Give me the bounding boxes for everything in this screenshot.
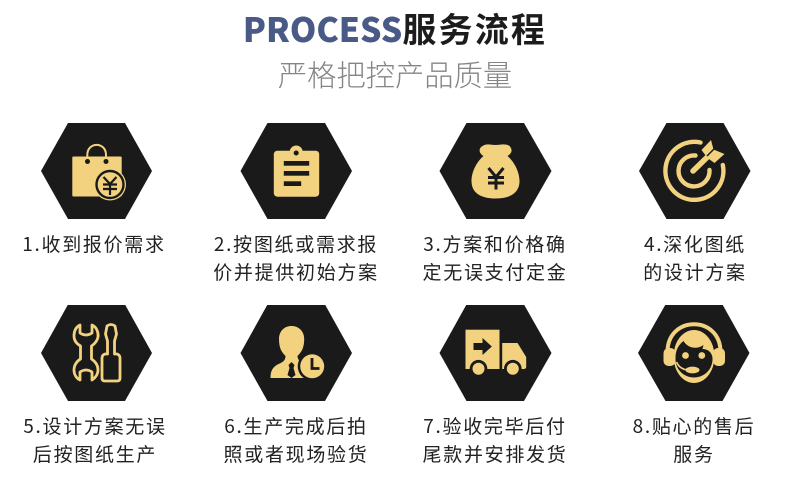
label: 照或者现场验货: [224, 440, 368, 466]
step 6: photos or on-site inspection: [224, 305, 368, 466]
step 8: after-sales service: [633, 305, 755, 466]
subtitle: 严格把控产品质量: [278, 53, 512, 95]
label: 6.生产完成后拍: [224, 412, 368, 439]
label: 4.深化图纸: [644, 230, 746, 257]
step 7: final payment and delivery: [423, 305, 567, 466]
label: [643, 230, 747, 284]
title: PROCESS服务流程: [243, 3, 547, 52]
icon: delivery truck: [440, 305, 552, 401]
icon: money bag: [440, 123, 552, 219]
label: 的设计方案: [643, 258, 747, 284]
icon: wrench and screwdriver: [41, 305, 152, 401]
icon: shopping bag with yen coin: [41, 123, 152, 219]
label: 5.设计方案无误: [23, 412, 167, 439]
label: [224, 412, 368, 466]
label: 3.方案和价格确: [423, 230, 567, 257]
label: 8.贴心的售后: [633, 412, 755, 439]
label: 1.收到报价需求: [22, 230, 166, 257]
label: 尾款并安排发货: [423, 440, 567, 466]
icon: person with clock: [240, 305, 352, 401]
label: [23, 412, 167, 466]
label: [423, 230, 567, 284]
label: 后按图纸生产: [33, 440, 157, 466]
icon: target with arrow: [639, 123, 750, 219]
step 4: refine drawing design: [639, 123, 750, 284]
label: [633, 412, 755, 466]
label: 定无误支付定金: [423, 258, 567, 284]
label: [213, 230, 379, 284]
label: 7.验收完毕后付: [423, 412, 567, 439]
label: 2.按图纸或需求报: [214, 230, 378, 257]
step 2: drawing and initial plan: [213, 123, 379, 284]
icon: clipboard: [240, 123, 352, 219]
icon: customer service headset: [638, 305, 750, 401]
step 5: produce after design confirmed: [23, 305, 167, 466]
label: 价并提供初始方案: [213, 258, 379, 284]
label: 服务: [673, 440, 715, 466]
step 1: receive quote request: [22, 123, 166, 257]
label: [423, 412, 567, 466]
step 3: confirm plan and pay deposit: [423, 123, 567, 284]
